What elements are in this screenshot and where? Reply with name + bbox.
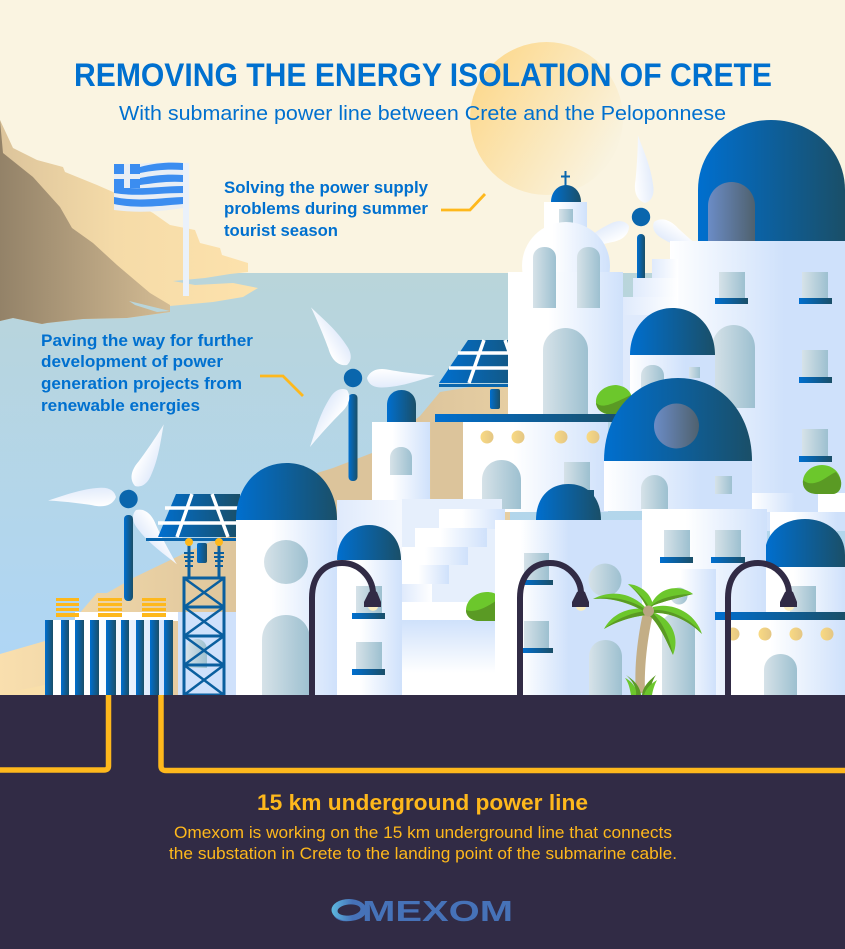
icon: wind turbine back <box>563 134 717 294</box>
callout: renewable energies: renewable energies <box>41 396 200 415</box>
beach foreground <box>0 685 45 696</box>
building: corner house with dome <box>715 519 845 696</box>
building: big domed house right <box>670 120 845 531</box>
building: white house with dome left <box>236 463 337 696</box>
callout: renewable energies: generation projects from <box>41 374 242 393</box>
icon: palm tree <box>593 584 702 695</box>
ground <box>0 695 845 949</box>
subtitle: With submarine power line between Crete and the Peloponnese <box>119 102 726 125</box>
small tower with dome <box>372 390 430 502</box>
title: REMOVING THE ENERGY ISOLATION OF CRETE <box>74 57 772 93</box>
icon: wind turbine left <box>48 421 184 601</box>
arrow: renewable callout pointer <box>260 376 303 396</box>
icon: substation transformer <box>45 598 173 696</box>
callout: renewable energies: development of power <box>41 352 223 371</box>
icon: solar panel right <box>439 340 540 409</box>
callout: summer tourist season <box>224 178 429 240</box>
tower background <box>178 612 236 696</box>
underground cable left <box>0 695 108 770</box>
icon: street lamp middle <box>520 563 589 696</box>
cross <box>561 171 570 186</box>
icon: wind turbine middle <box>302 302 435 481</box>
heading: underground power line: 15 km underground power line <box>257 790 588 815</box>
text block: underground description <box>169 823 677 863</box>
white stairs behind church <box>623 259 678 415</box>
callout: summer tourist season: problems during summer <box>224 199 428 218</box>
arrow: summer callout pointer <box>441 194 485 210</box>
sea <box>0 273 845 698</box>
text block: underground description: the substation in Crete to the landing point of the submarine cable. <box>169 844 677 863</box>
callout: renewable energies <box>41 331 253 415</box>
cliff headland <box>0 120 258 324</box>
icon: green bush lower <box>466 592 497 621</box>
transformer background strip <box>75 612 236 621</box>
building: center house <box>495 484 642 696</box>
building: large blue dome church <box>604 378 752 511</box>
icon: Greek flag <box>114 162 189 296</box>
icon: solar panel left <box>146 494 240 563</box>
white stairs lower <box>337 499 505 696</box>
logo: Omexom: OMEXOM <box>331 896 513 928</box>
sky background <box>0 0 845 274</box>
sun <box>470 42 623 195</box>
building: bell tower church <box>508 171 623 422</box>
icon: street lamp right <box>728 563 797 696</box>
building: middle row with gold dots <box>431 414 620 512</box>
icon: street lamp left <box>312 563 381 696</box>
callout: summer tourist season: Solving the power supply <box>224 178 429 197</box>
building: house with two windows <box>642 509 767 696</box>
callout: renewable energies: Paving the way for further <box>41 331 253 350</box>
icon: green bush upper <box>596 385 632 415</box>
building: small dome house <box>630 308 715 415</box>
icon: green bush right <box>803 465 841 494</box>
text block: underground description: Omexom is working on the 15 km underground line that connects <box>174 823 672 842</box>
building: small house with dome <box>337 525 402 696</box>
sand hill <box>0 385 510 696</box>
underground cable right <box>161 695 845 770</box>
callout: summer tourist season: tourist season <box>224 221 338 240</box>
icon: transmission tower <box>184 538 224 695</box>
right side blocks <box>752 493 845 542</box>
